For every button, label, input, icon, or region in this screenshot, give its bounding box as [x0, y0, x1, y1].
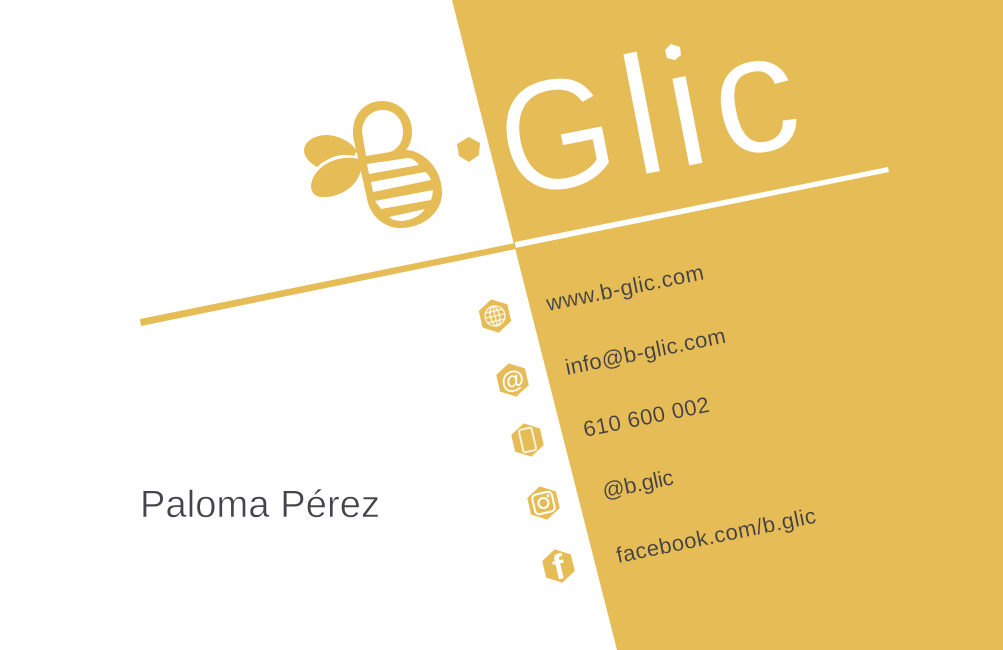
divider: yellow left line	[140, 243, 516, 326]
logo: bee	[304, 101, 442, 228]
name: Paloma Pérez	[140, 484, 380, 526]
icon: at sign: @	[498, 365, 527, 396]
text: email: info@b-glic.com	[563, 323, 728, 380]
text: instagram: @b.glic	[600, 465, 676, 503]
text: phone: 610 600 002	[581, 392, 711, 442]
contact: facebook	[540, 503, 818, 590]
icon: globe	[477, 296, 513, 336]
contact: website	[477, 260, 706, 336]
text: facebook: facebook.com/b.glic	[614, 503, 818, 568]
icon: facebook: f	[549, 547, 569, 588]
bee wings	[304, 135, 363, 197]
icon: instagram	[525, 483, 562, 523]
icon: at sign	[494, 360, 531, 400]
icon: facebook	[540, 545, 578, 590]
contact: phone	[509, 392, 711, 460]
bee stripes	[367, 158, 433, 221]
contact: instagram	[525, 465, 676, 523]
bee head hole	[362, 110, 403, 156]
icon: phone	[509, 420, 546, 460]
bee body	[353, 101, 442, 228]
title: Glic	[482, 0, 814, 237]
icon: hexagon separator	[457, 137, 480, 162]
title: Glic: G	[483, 37, 630, 232]
text: website: www.b-glic.com	[543, 260, 706, 316]
divider: white right line	[515, 167, 889, 248]
contact: email	[494, 323, 728, 400]
panel: yellow diagonal	[452, 0, 1003, 650]
icon: hexagon dot on the letter i	[665, 44, 681, 60]
